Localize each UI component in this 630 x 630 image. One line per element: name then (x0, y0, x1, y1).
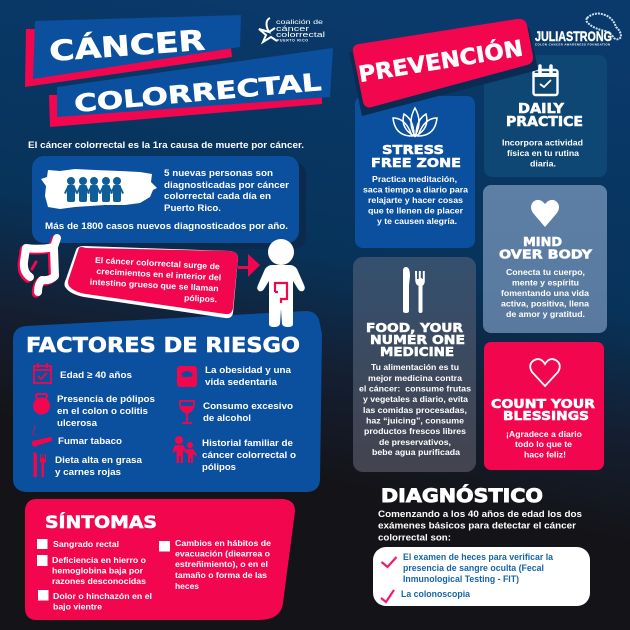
logo: coalición de cáncer colorrectal: colorrectal (276, 30, 325, 39)
panel: stress free zone: saca tiempo a diario para (363, 184, 468, 194)
checkboxes (37, 539, 170, 600)
section: diagnóstico: exámenes básicos para detectar el cáncer (378, 520, 576, 532)
title: cáncer (25, 15, 241, 87)
panel: stress free zone: relajarte y hacer cosas (368, 195, 463, 205)
logo: juliastrong: COLON CANCER AWARENESS FOUNDATION (535, 42, 610, 46)
panel: food (353, 257, 476, 472)
icon: knife and fork (403, 267, 425, 313)
panel: síntomas: razones desconocidas (52, 576, 146, 586)
callout: polyps: pólipos. (184, 293, 217, 304)
panel: exams: El examen de heces para verificar la (403, 552, 553, 562)
icon: family (172, 436, 197, 463)
icon: check (382, 557, 396, 567)
arrow (238, 254, 260, 277)
logo: coalición de cáncer colorrectal (259, 18, 325, 42)
panel: food: de preservativos, (379, 437, 451, 447)
panel: síntomas: Cambios en hábitos de (175, 538, 271, 548)
panel: food: las comidas procesadas, (363, 405, 467, 415)
callout: polyps: intestino grueso que se llaman (90, 277, 219, 293)
icon: wine glass (180, 401, 194, 423)
panel: síntomas: hemoglobina baja por (52, 566, 144, 576)
panel: factores de riesgo: en el colon o colitis (57, 406, 148, 417)
panel: factores de riesgo: La obesidad y una (205, 365, 292, 376)
panel: stress free zone: FREE ZONE (371, 155, 461, 170)
panel: statistics: colorrectal cada día en (164, 191, 271, 202)
icon: knife and fork (34, 452, 46, 477)
panel: factores de riesgo: de alcohol (203, 413, 251, 424)
banner: prevención (349, 19, 538, 116)
panel: statistics: 5 nuevas personas son (164, 168, 273, 179)
panel: daily practice: física en tu rutina (507, 148, 579, 158)
section: diagnóstico: Comenzando a los 40 años de edad los dos (378, 509, 582, 520)
icon: lotus (393, 108, 437, 136)
icon: calendar (34, 363, 51, 383)
panel: síntomas (25, 499, 295, 620)
section: diagnóstico: colorrectal son: (378, 532, 451, 544)
panel: food: el cáncer: consume frutas (359, 384, 471, 394)
logo: coalición de cáncer colorrectal: cáncer (276, 24, 310, 33)
panel: statistics: Más de 1800 casos nuevos diagnosticados por año. (45, 221, 288, 232)
panel: count your blessings (484, 342, 604, 470)
panel: count your blessings: hace feliz! (524, 450, 566, 460)
panel: factores de riesgo: y carnes rojas (55, 467, 121, 478)
panel: count your blessings: COUNT YOUR (491, 396, 595, 411)
logo: coalición de cáncer colorrectal: coalición de (276, 19, 324, 26)
panel: count your blessings: BLESSINGS (503, 408, 589, 423)
panel: factores de riesgo: Edad ≥ 40 años (60, 370, 132, 381)
panel: count your blessings: ¡Agradece a diario (506, 429, 582, 439)
panel: mind over body: activa, positiva, llena (501, 298, 589, 308)
section: diagnóstico (373, 483, 590, 606)
panel: mind over body: Conecta tu cuerpo, (506, 267, 585, 277)
icon: calendar (534, 66, 558, 95)
panel: stress free zone (355, 96, 475, 248)
panel: factores de riesgo: pólipos (202, 462, 236, 473)
callout: polyps (64, 246, 238, 318)
intro sentence: El cáncer colorrectal es la 1ra causa de muerte por cáncer. (28, 140, 304, 151)
panel: exams: presencia de sangre oculta (Fecal (403, 563, 544, 573)
icon: outline heart (530, 359, 560, 386)
panel: food: FOOD, YOUR (366, 321, 463, 335)
panel: síntomas: evacuación (diearrea o (175, 548, 270, 558)
heading: diagnóstico: DIAGNÓSTICO (381, 483, 543, 507)
icon: kettlebell (33, 394, 50, 414)
icon: puerto rico map with people (41, 169, 157, 209)
logo: juliastrong (535, 14, 621, 46)
panel: mind over body: de amor y gratitud. (506, 309, 585, 319)
panel: stress free zone: que te llenen de placer (368, 206, 464, 216)
panel: factores de riesgo: ulcerosa (57, 418, 98, 429)
panel: daily practice (484, 55, 607, 177)
icon: check (381, 590, 394, 602)
icon: colon (22, 238, 57, 294)
panel: factores de riesgo: vida sedentaria (205, 377, 278, 388)
panel: food: NUMER ONE (370, 333, 465, 347)
icon: cigarette (32, 425, 52, 447)
panel: stress free zone: y te causen alegría. (377, 216, 457, 226)
panel: stress free zone: Practica meditación, (372, 174, 457, 184)
panel: daily practice: DAILY (518, 102, 565, 117)
panel: mind over body: mente y espíritu (512, 278, 579, 288)
panel: síntomas: Dolor o hinchazón en el (53, 591, 152, 601)
panel: factores de riesgo: Consumo excesivo (203, 401, 293, 412)
icon: filled heart (531, 200, 559, 227)
panel: daily practice: PRACTICE (506, 115, 583, 130)
heading: factores de riesgo: FACTORES DE RIESGO (26, 333, 300, 357)
panel: count your blessings: todo lo que te (515, 439, 572, 449)
panel: síntomas: bajo vientre (53, 602, 102, 612)
icon: person (257, 239, 305, 327)
panel: síntomas: Deficiencia en hierro o (52, 555, 146, 565)
panel: factores de riesgo: cáncer colorrectal o (202, 450, 296, 461)
panel: food: MEDICINE (380, 345, 454, 359)
panel: statistics: Puerto Rico. (164, 203, 221, 214)
panel: daily practice: diaria. (530, 158, 556, 168)
panel: exams: La colonoscopia (401, 589, 470, 599)
panel: food: bebe agua purificada (372, 447, 460, 457)
panel: food: Tu alimentación es tu (371, 362, 459, 372)
panel: food: productos frescos libres (364, 426, 466, 436)
panel: factores de riesgo: Dieta alta en grasa (55, 455, 143, 466)
panel: factores de riesgo (13, 311, 322, 492)
logo: coalición de cáncer colorrectal: PUERTO RICO (277, 38, 308, 42)
panel: factores de riesgo: Presencia de pólipos (57, 394, 155, 405)
panel: síntomas: estreñimiento), o en el (175, 559, 268, 569)
panel: factores de riesgo: Fumar tabaco (58, 436, 122, 447)
title: colorrectal: COLORRECTAL (73, 68, 323, 118)
panel: statistics: diagnosticadas por cáncer (164, 180, 289, 191)
title: colorrectal (49, 48, 333, 127)
logo: juliastrong: JULIASTRONG (535, 29, 612, 44)
panel: mind over body (483, 185, 607, 333)
heading: síntomas: SÍNTOMAS (45, 511, 157, 533)
icon: scale (177, 366, 197, 387)
panel: food: haz “juicing”, consume (366, 416, 464, 426)
panel: food: mejor medicina contra (368, 373, 462, 383)
panel: daily practice: Incorpora actividad (502, 138, 583, 148)
panel: statistics (32, 156, 306, 249)
panel: exams (373, 547, 590, 606)
panel: mind over body: MIND (523, 234, 562, 249)
panel: factores de riesgo: Historial familiar de (202, 438, 293, 449)
panel: food: y vegetales a diario, evita (363, 394, 468, 404)
panel: mind over body: OVER BODY (499, 246, 593, 262)
panel: exams: Inmunological Testing - FIT) (403, 574, 519, 584)
panel: síntomas: tamaño o forma de las (175, 570, 267, 580)
panel: síntomas: Sangrado rectal (53, 539, 119, 549)
callout: polyps: El cáncer colorrectal surge de (95, 255, 220, 271)
panel: síntomas: heces (175, 581, 199, 591)
title: cáncer: CÁNCER (48, 23, 206, 68)
callout: polyps: crecimientos en el interior del (96, 266, 221, 282)
banner: prevención: PREVENCIÓN (357, 35, 525, 88)
panel: stress free zone: STRESS (382, 142, 444, 157)
panel: mind over body: fomentando una vida (501, 288, 589, 298)
title banner (25, 15, 333, 127)
